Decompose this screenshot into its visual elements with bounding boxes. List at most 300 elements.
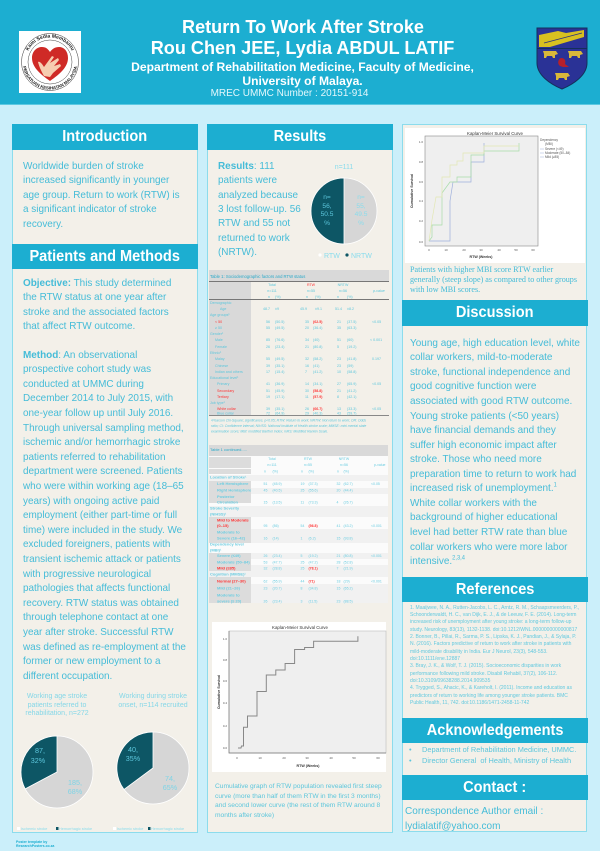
- caption: working age pie: rehabilitation, n=272: [25, 710, 89, 717]
- table 1 continued: clinical factors: RTW: [304, 457, 313, 461]
- table 1 continued: clinical factors: (86): [272, 524, 279, 528]
- table 1: sociodemographic factors: 72: [266, 412, 270, 416]
- text: method: conducted at UMMC during: [23, 379, 144, 390]
- chart: Kaplan-Meier survival curve, overall: 10: [258, 756, 262, 760]
- icon: university crest: [536, 28, 588, 90]
- table 1 continued: clinical factors: (65.2): [344, 586, 353, 590]
- chart: Kaplan-Meier survival curve by dependency: 0: [428, 248, 430, 252]
- text: references: 4. Trygged, S., Ahacic, K., & Kareholt, I. (2011). Income and education as: [410, 685, 572, 691]
- chart: Kaplan-Meier survival curve by dependency: Moderate (50–84): [545, 151, 570, 155]
- text: references: doi:10.1111/ene.12887: [410, 656, 460, 662]
- table 1 continued: clinical factors: Mild to Moderate: [217, 518, 250, 522]
- table 1 continued: clinical factors: 54: [300, 524, 304, 528]
- table 1 continued: clinical factors: 7: [336, 566, 338, 570]
- table 1 continued: clinical factors: 41: [336, 524, 340, 528]
- table 1 continued: clinical factors: Cognition (MMSE)¹: [210, 572, 246, 576]
- table 1: sociodemographic factors: (15.4): [275, 370, 284, 374]
- text: discussion: suffer high economic impact after: [410, 440, 556, 451]
- text: right chart caption: [410, 265, 577, 294]
- table 1: sociodemographic factors: (37.5): [347, 320, 356, 324]
- table 1: sociodemographic factors: ≥ 50: [215, 326, 222, 330]
- table 1: sociodemographic factors: 16: [305, 364, 309, 368]
- table 1 continued: clinical factors: 44: [300, 580, 304, 584]
- pie chart: RTW vs NRTW: 55,: [356, 203, 366, 210]
- text: method: prospective cohort study was: [23, 364, 151, 375]
- panel: right column: [402, 124, 587, 832]
- table 1: sociodemographic factors: Educational level¹: [210, 376, 239, 380]
- caption: working during stroke pie: Working during stroke: [119, 693, 187, 700]
- text: references: doi:10.3109/09638288.2014.909535: [410, 678, 490, 684]
- text: chart caption: Cumulative graph of RTW population revealed first steep: [215, 783, 382, 790]
- table 1 continued: clinical factors: Circulation: [217, 500, 238, 504]
- text: method: [23, 350, 186, 682]
- table 1: sociodemographic factors: (58.8): [313, 389, 323, 393]
- table 1: sociodemographic factors: Secondary: [217, 389, 234, 393]
- text: objective: [23, 278, 171, 332]
- table 1: sociodemographic factors: 23: [337, 364, 341, 368]
- heading: results: Results: [274, 128, 326, 145]
- text: references: 2. Bonner, B., Pillai, R., Sarma, P. S., Lipska, K. J., Pandian, J., & Sylaja, P.: [410, 634, 576, 640]
- table 1: sociodemographic factors: Blue collar: [217, 412, 235, 416]
- table 1: sociodemographic factors: n: [337, 295, 339, 299]
- table 1 continued: clinical factors: Right Hemisphere: [217, 488, 252, 492]
- text: right chart caption: generally (steep slope) as compared to other groups: [410, 275, 577, 284]
- chart: Kaplan-Meier survival curve by dependency: Kaplan-Meier Survival Curve: [467, 131, 523, 136]
- pie chart: RTW vs NRTW: %: [358, 220, 364, 227]
- table 1 continued: clinical factors: n: [337, 470, 339, 474]
- table 1: sociodemographic factors: White collar: [217, 407, 237, 411]
- text: introduction: [23, 161, 180, 230]
- heading: discussion: [402, 300, 588, 326]
- pie chart: RTW vs NRTW: RTW: [324, 253, 340, 260]
- text: contact: lydialatif@yahoo.com: [405, 820, 500, 832]
- poster template credit: [16, 840, 54, 848]
- pie chart: RTW vs NRTW: [310, 164, 378, 260]
- panel: results: [207, 124, 393, 833]
- table 1: sociodemographic factors: 55: [266, 357, 270, 361]
- table 1: sociodemographic factors: ratio; CI: Confidence interval; NIHSS: National Institute of Health stroke scale; MMSE: mini mental state: [211, 424, 366, 428]
- text: results: RTW and 55 not: [218, 218, 290, 229]
- chart: Kaplan-Meier survival curve by dependency: 0.0: [419, 240, 423, 244]
- table 1 continued: clinical factors: (%): [344, 470, 349, 474]
- table 1 continued: clinical factors: 21: [336, 554, 340, 558]
- table 1 continued: clinical factors: (73.3): [308, 500, 318, 504]
- table 1 continued: clinical factors: (37.3): [308, 482, 318, 486]
- table 1 continued: clinical factors: (45.9): [272, 482, 282, 486]
- table 1 continued: clinical factors: (29): [344, 580, 350, 584]
- table 1: sociodemographic factors: <0.05: [372, 407, 381, 411]
- table 1 continued: clinical factors: Stroke Severity: [210, 506, 240, 510]
- table 1 continued: clinical factors: (93.8): [344, 536, 353, 540]
- table 1: sociodemographic factors: (62.5): [313, 320, 323, 324]
- table 1: sociodemographic factors: 39: [266, 407, 270, 411]
- table 1: sociodemographic factors: (34.1): [313, 382, 322, 386]
- chart: Kaplan-Meier survival curve by dependency: 20: [462, 248, 466, 252]
- table 1 continued: clinical factors: (NIHSS)¹: [210, 512, 227, 516]
- table 1: sociodemographic factors: (41.2): [313, 370, 322, 374]
- table 1: sociodemographic factors: 35: [305, 320, 309, 324]
- table 1: sociodemographic factors: (45.9): [275, 389, 284, 393]
- table 1: sociodemographic factors: 21: [305, 345, 309, 349]
- table 1: sociodemographic factors: (59): [347, 364, 353, 368]
- table 1: sociodemographic factors: (63.3): [347, 326, 356, 330]
- pie chart: working during stroke: 40,: [128, 745, 138, 754]
- text: introduction: increased significantly in younger: [23, 175, 169, 186]
- text: method: years) with ongoing active paid: [23, 496, 159, 507]
- table 1 continued: clinical factors: 25: [300, 488, 304, 492]
- table 1: sociodemographic factors: 41: [266, 382, 270, 386]
- table 1: sociodemographic factors: p-value: [372, 289, 385, 293]
- table 1: sociodemographic factors: Male: [215, 338, 223, 342]
- table 1 continued: clinical factors: <0.001: [371, 554, 382, 558]
- chart: Kaplan-Meier survival curve, overall: 0.6: [223, 679, 227, 683]
- pie chart: working during stroke: Hemorrhagic stroke: [151, 827, 184, 831]
- text: method: who were within working age (18–65: [23, 481, 183, 492]
- table 1: sociodemographic factors: 51.4: [335, 307, 342, 311]
- table 1 continued: clinical factors: (52.8): [344, 560, 353, 564]
- table 1 continued: clinical factors: (MBI)¹: [210, 548, 222, 552]
- table 1: sociodemographic factors: ¹Pearson Chi-Square; significance, p<0.05; RTW: Return to work; NRTW: Not return to work; OR: Odds: [211, 418, 366, 422]
- table 1 continued: clinical factors: 18: [336, 580, 340, 584]
- text: references: 1. Maaijwee, N. A., Rutten-Jacobs, L. C., Arntz, R. M., Schaapsmeerders, P.,: [410, 604, 579, 610]
- table 1: sociodemographic factors: NRTW: [338, 283, 349, 287]
- text: discussion: good cognitive function were: [410, 381, 536, 392]
- pie chart: RTW vs NRTW: 56,: [322, 203, 332, 210]
- table 1 continued: clinical factors: 5: [300, 554, 302, 558]
- table 1 continued: clinical factors: (55.6): [308, 488, 318, 492]
- pie chart: RTW vs NRTW: 49.5: [355, 211, 368, 218]
- table 1 continued: clinical factors: Mild (21–26): [217, 586, 241, 590]
- table 1 continued: clinical factors: n: [264, 470, 266, 474]
- text: chart caption: [215, 783, 382, 819]
- table 1: sociodemographic factors: n: [268, 295, 270, 299]
- caption: working age pie: Working age stroke: [27, 693, 87, 700]
- table 1: sociodemographic factors: (36.4): [313, 326, 322, 330]
- table 1: sociodemographic factors: (64.9): [275, 412, 284, 416]
- icon: stroke association logo: PERSATUAN KESIHATAN MALAYSIA: [23, 66, 78, 90]
- text: right chart caption: Patients with higher MBI score RTW earlier: [410, 265, 553, 274]
- table 1 continued: clinical factors: 16: [264, 536, 267, 540]
- table 1 continued: clinical factors: Location of Stroke¹: [210, 474, 247, 480]
- table 1: sociodemographic factors: examination score; MBI: modified Barthel Index; mRS: Modified Rankin Scale.: [211, 430, 328, 434]
- pie chart: working age stroke: 32%: [31, 756, 46, 765]
- table 1: sociodemographic factors: 85: [266, 338, 270, 342]
- table 1 continued: clinical factors: Dependency level: [210, 542, 244, 546]
- table 1: sociodemographic factors: 27: [337, 382, 341, 386]
- table 1: sociodemographic factors: 20: [305, 326, 309, 330]
- table 1: sociodemographic factors: Tertiary: [217, 395, 229, 399]
- text: chart caption: curve (more than half of them RTW in the first 3 months): [215, 793, 381, 800]
- table 1 continued: clinical factors: NRTW: [339, 457, 350, 461]
- text: introduction: recovery.: [23, 219, 63, 230]
- text: references: 3. Bray, J. K., & Wolf, T. J. (2015). Socioeconomic disparities in work: [410, 663, 561, 669]
- text: objective: Objective: This study determined: [23, 278, 171, 289]
- table 1: sociodemographic factors: n=111: [267, 289, 277, 293]
- heading: discussion: Discussion: [456, 304, 534, 321]
- table 1: sociodemographic factors: (58.8): [347, 370, 356, 374]
- table 1 continued: clinical factors: (44.4): [344, 488, 353, 492]
- pie chart: working age stroke: Ischemic stroke: [21, 827, 47, 831]
- table 1 continued: clinical factors: (47.2): [308, 560, 318, 564]
- chart: Kaplan-Meier survival curve by dependency: Dependency: [540, 138, 558, 142]
- heading: patients and methods: [12, 244, 198, 269]
- heading: results: [207, 124, 393, 150]
- text: contact: Correspondence Author email :: [405, 806, 543, 816]
- text: introduction: age group. Return to work (RTW) is: [23, 190, 179, 201]
- table 1: sociodemographic factors: n: [306, 295, 308, 299]
- table 1: sociodemographic factors: 43: [337, 412, 341, 416]
- table 1 continued: clinical factors: (%): [308, 470, 314, 474]
- table 1 continued: clinical factors: 62: [264, 580, 267, 584]
- pie chart: RTW vs NRTW: n=: [323, 194, 331, 201]
- text: acknowledgements: •: [409, 756, 412, 765]
- table 1 continued: clinical factors: (80.8): [344, 554, 353, 558]
- table 1: sociodemographic factors: Age groups¹: [210, 313, 230, 317]
- chart: Kaplan-Meier survival curve, overall: Cumulative Survival: [217, 675, 221, 709]
- table 1 continued: clinical factors: 26: [264, 600, 267, 604]
- text: method: time) were included in the study. We: [23, 525, 182, 536]
- chart: Kaplan-Meier survival curve, overall: 1.0: [223, 637, 227, 641]
- table 1 continued: clinical factors: 4: [336, 500, 338, 504]
- heading: introduction: Introduction: [63, 128, 147, 145]
- text: method: different occupation.: [23, 671, 112, 682]
- chart: Kaplan-Meier survival curve by dependency: 40: [497, 248, 501, 252]
- text: right chart caption: with low MBI scores.: [410, 285, 480, 294]
- pie chart: RTW vs NRTW: NRTW: [351, 253, 372, 260]
- header banner: [0, 0, 600, 105]
- text: introduction: Worldwide burden of stroke: [23, 161, 143, 172]
- table 1: sociodemographic factors: (40.3): [313, 412, 322, 416]
- table 1: sociodemographic factors: 11: [305, 395, 309, 399]
- table 1: sociodemographic factors: (57.9): [313, 395, 323, 399]
- table 1 continued: clinical factors: Normal (27–30): [217, 578, 246, 584]
- text: discussion: intensive.2,3,4: [410, 556, 465, 567]
- text: results: [218, 161, 301, 258]
- chart: Kaplan-Meier survival curve by dependency: 0.4: [419, 199, 423, 203]
- table 1: sociodemographic factors: (%): [275, 295, 281, 299]
- table 1: sociodemographic factors: Demographic: [210, 301, 232, 305]
- text: discussion: stroke, functional independence and: [410, 367, 570, 378]
- text: introduction: a significant indicator of stroke: [23, 204, 156, 215]
- table 1: sociodemographic factors: (35.1): [275, 364, 284, 368]
- text: method: was defined as re-employment at the: [23, 642, 186, 653]
- text: method: through telephone contact at one: [23, 612, 168, 623]
- table 1 continued: clinical factors: 8: [300, 586, 302, 590]
- chart: Kaplan-Meier survival curve by dependency: 0.2: [419, 219, 423, 223]
- text: method: Method: An observational: [23, 350, 137, 361]
- table 1 continued: clinical factors: 25: [300, 566, 304, 570]
- heading: references: [402, 577, 588, 602]
- table 1 continued: clinical factors: (78.1): [308, 566, 318, 570]
- affiliation: Department of Rehabilitation Medicine, Faculty of Medicine,: [131, 60, 474, 74]
- text: acknowledgements: Director General of Health, Ministry of Health: [422, 756, 571, 765]
- table 1: sociodemographic factors: Gender¹: [210, 332, 224, 336]
- table 1 continued: clinical factors: 23: [336, 600, 340, 604]
- text: objective: that affect RTW outcome.: [23, 321, 135, 332]
- pie chart: working age stroke: 87,: [35, 746, 45, 755]
- table 1: sociodemographic factors: (76.6): [275, 338, 284, 342]
- table 1: sociodemographic factors: Ethnic¹: [210, 351, 222, 355]
- table 1: sociodemographic factors: (65.9): [347, 382, 356, 386]
- table 1: sociodemographic factors: n=56: [339, 289, 347, 293]
- table 1 continued: clinical factors: Moderate to: [217, 530, 240, 534]
- chart: Kaplan-Meier survival curve by dependency: Mild (≥85): [545, 155, 559, 159]
- chart: Kaplan-Meier survival curve, overall: 0: [236, 756, 238, 760]
- table 1 continued: clinical factors: 15: [336, 536, 340, 540]
- table 1: sociodemographic factors: 34: [305, 338, 309, 342]
- text: references: increased risk of unemployment after young stroke: a long-term follow-up: [410, 619, 571, 625]
- chart: Kaplan-Meier survival curve, overall: 0.0: [223, 746, 227, 750]
- heading: acknowledgements: Acknowledgements: [427, 722, 563, 739]
- table 1: sociodemographic factors: ±9.1: [315, 307, 322, 311]
- chart: Kaplan-Meier survival curve by dependency: 1.0: [419, 140, 423, 144]
- text: chart caption: months after stroke): [215, 812, 274, 819]
- table 1 continued: clinical factors: 53: [264, 560, 267, 564]
- table 1 continued: clinical factors: (28.8): [272, 566, 282, 570]
- chart: Kaplan-Meier survival curve, overall: 40: [329, 756, 333, 760]
- table 1 continued: clinical factors: severe (≤ 20): [217, 598, 242, 604]
- text: method: December 2014 to July 2015, with: [23, 393, 173, 404]
- chart: Kaplan-Meier survival curve, overall: 0.8: [223, 658, 227, 662]
- chart: Kaplan-Meier survival curve, overall: Kaplan-Meier Survival Curve: [272, 625, 328, 630]
- heading: acknowledgements: [402, 718, 588, 743]
- table 1: sociodemographic factors: 56: [266, 320, 270, 324]
- poster template credit: Poster template by: [16, 840, 47, 844]
- text: method: transient ischemic attack or patients: [23, 554, 181, 565]
- table 1 continued: clinical factors: (55.9): [272, 580, 282, 584]
- text: method: patients referred to rehabilitation: [23, 452, 165, 463]
- text: objective: the RTW status at one year after: [23, 292, 166, 303]
- text: results: (NRTW).: [218, 247, 257, 258]
- table 1 continued: clinical factors: 51: [264, 482, 267, 486]
- table 1: sociodemographic factors: (49.5): [275, 357, 284, 361]
- text: objective: stroke and the associated factors: [23, 307, 168, 318]
- table 1: sociodemographic factors: 30: [305, 389, 309, 393]
- chart: Kaplan-Meier survival curve by dependency: (MBI): [545, 142, 553, 146]
- table 1 continued: clinical factors: [209, 445, 388, 604]
- table 1: sociodemographic factors: 45.9: [300, 307, 307, 311]
- pie chart: working age stroke: 185,: [68, 778, 82, 787]
- affiliation: University of Malaya.: [242, 74, 363, 88]
- table 1 continued: clinical factors: 19: [300, 482, 304, 486]
- text: results: 3 lost follow-up. 56: [218, 204, 301, 215]
- table 1: sociodemographic factors: 7: [305, 370, 307, 374]
- caption: working age pie: [25, 692, 89, 717]
- text: method: excluded foreigners, patients with: [23, 539, 170, 550]
- caption: working age pie: patients referred to: [28, 702, 86, 709]
- table 1 continued: clinical factors: 32: [336, 482, 340, 486]
- table 1 continued: clinical factors: 11: [300, 500, 304, 504]
- table 1: sociodemographic factors: <0.05: [372, 382, 381, 386]
- text: results: returned to work: [218, 233, 290, 244]
- table 1 continued: clinical factors: (71): [308, 580, 315, 584]
- text: chart caption: and second lower curve (the rest of them RTW around 8: [215, 802, 380, 809]
- table 1: sociodemographic factors: (66.7): [313, 407, 323, 411]
- table 1: sociodemographic factors: ±8.2: [347, 307, 354, 311]
- table 1: sociodemographic factors: (58.2): [313, 357, 322, 361]
- text: discussion: have financial demands and they: [410, 425, 556, 436]
- text: method: Through universal sampling method,: [23, 423, 183, 434]
- table 1: sociodemographic factors: Malay: [215, 357, 225, 361]
- table 1 continued: clinical factors: 32: [264, 566, 267, 570]
- title: Return To Work After Stroke: [182, 17, 424, 37]
- table 1: sociodemographic factors: n=55: [307, 289, 315, 293]
- pie chart: working during stroke: 65%: [163, 783, 178, 792]
- pie chart: working age stroke: [17, 736, 94, 831]
- table 1 continued: clinical factors: n: [301, 470, 303, 474]
- pie chart: working age stroke: Hemorrhagic stroke: [59, 827, 92, 831]
- text: discussion: White collar workers with the: [410, 498, 537, 509]
- table 1: sociodemographic factors: (80.8): [313, 345, 322, 349]
- table 1: sociodemographic factors: 0.197: [372, 357, 381, 361]
- table 1 continued: clinical factors: Moderate to: [217, 592, 240, 598]
- heading: introduction: [12, 124, 198, 150]
- table 1: sociodemographic factors: 55: [266, 326, 270, 330]
- table 1: sociodemographic factors: 51: [266, 389, 270, 393]
- text: results: analyzed because: [218, 190, 298, 201]
- table 1 continued: clinical factors: (88.5): [344, 600, 353, 604]
- table 1 continued: clinical factors: <0.001: [371, 524, 382, 528]
- table 1 continued: clinical factors: (6.2): [308, 536, 316, 540]
- table 1: sociodemographic factors: 35: [337, 326, 341, 330]
- text: acknowledgements: Department of Rehabilitation Medicine, UMMC.: [422, 745, 576, 754]
- chart: Kaplan-Meier survival curve by dependency: Severe (<49): [545, 147, 564, 151]
- text: method: with progressive neurological: [23, 569, 151, 580]
- table 1: sociodemographic factors: (41): [313, 364, 319, 368]
- text: discussion: [410, 338, 580, 567]
- table 1 continued: clinical factors: (47.7): [272, 560, 282, 564]
- pie chart: RTW vs NRTW: n=111: [335, 164, 353, 171]
- table 1 continued: clinical factors: Left Hemisphere: [217, 481, 249, 486]
- text: method: former or new employment to a: [23, 656, 160, 667]
- chart: Kaplan-Meier survival curve by dependency: 60: [531, 248, 535, 252]
- table 1: sociodemographic factors: Chinese: [215, 364, 228, 368]
- chart: Kaplan-Meier survival curve by dependency: Cumulative Survival: [410, 174, 414, 208]
- table 1: sociodemographic factors: < 0.001: [370, 338, 382, 342]
- text: method: recovery. RTW status was obtained: [23, 598, 179, 609]
- table 1 continued: clinical factors: Moderate (50–84): [217, 560, 250, 564]
- heading: contact: [402, 775, 588, 800]
- table 1 continued: clinical factors: Table 1 continued.....: [210, 447, 247, 452]
- table 1: sociodemographic factors: 51: [337, 338, 341, 342]
- icon: stroke association logo: [19, 31, 81, 93]
- table 1 continued: clinical factors: (20.7): [272, 586, 282, 590]
- table 1 continued: clinical factors: 15: [336, 586, 340, 590]
- heading: references: References: [456, 581, 534, 598]
- table 1: sociodemographic factors: Indian and others: [215, 370, 243, 374]
- text: method: one-year follow up until July 2016.: [23, 408, 173, 419]
- table 1: sociodemographic factors: (23.4): [275, 345, 284, 349]
- text: acknowledgements: [409, 745, 576, 765]
- table 1: sociodemographic factors: [209, 270, 389, 434]
- table 1 continued: clinical factors: Total: [268, 457, 276, 461]
- table 1: sociodemographic factors: 21: [337, 320, 341, 324]
- text: discussion: collar workers who were more labor: [410, 542, 567, 553]
- table 1 continued: clinical factors: (56.8): [308, 524, 318, 528]
- table 1 continued: clinical factors: Severe (≤49): [217, 553, 241, 558]
- table 1: sociodemographic factors: (%): [315, 295, 321, 299]
- table 1 continued: clinical factors: (21.9): [344, 566, 353, 570]
- text: results: patients were: [218, 175, 277, 186]
- text: discussion: background of higher educational: [410, 512, 557, 523]
- text: references: N. (2016). Factors predictive of return to work after stroke in patients with: [410, 641, 571, 647]
- text: references: predictors of return to working life among younger stroke patients. BMC: [410, 693, 568, 699]
- table 1 continued: clinical factors: (26.7): [344, 500, 353, 504]
- table 1 continued: clinical factors: 23: [264, 586, 267, 590]
- pie chart: RTW vs NRTW: 50.5: [321, 211, 334, 218]
- panel: left column: [12, 124, 198, 833]
- text: references: study. Neurology, 83(13), 1132-1138. doi:10.1212/WNL.0000000000000817: [410, 627, 577, 633]
